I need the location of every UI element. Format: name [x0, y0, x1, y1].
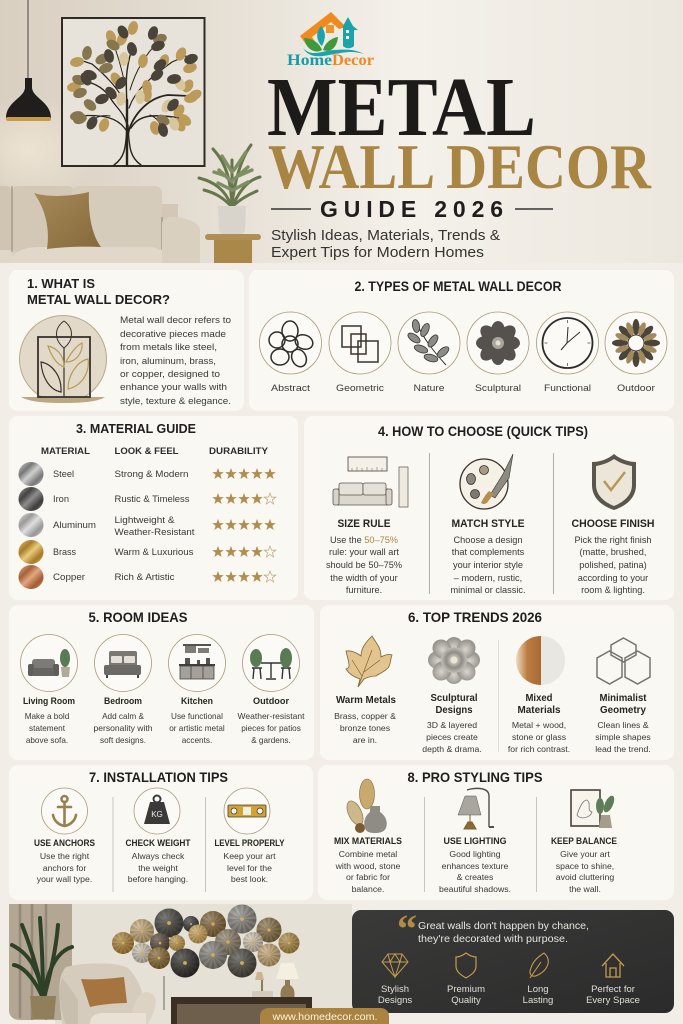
heading: 1. WHAT IS	[27, 276, 95, 291]
title: METAL: METAL	[267, 61, 536, 154]
tip: check weight: CHECK WEIGHT	[126, 838, 191, 849]
tip: mix materials: Combine metal	[339, 849, 397, 859]
room: outdoor: Outdoor	[253, 696, 289, 707]
heading: 6. TOP TRENDS 2026	[408, 609, 542, 625]
type: abstract	[260, 312, 322, 374]
heading: METAL WALL DECOR?	[27, 292, 170, 307]
tip: keep balance: Give your art	[560, 849, 610, 859]
tip: size rule: SIZE RULE	[338, 518, 390, 530]
quote text: they're decorated with purpose.	[418, 933, 568, 945]
type: geometric	[329, 312, 391, 374]
room: bedroom: Add calm &	[102, 712, 144, 721]
tip: choose finish: polished, patina)	[579, 560, 647, 570]
table header	[41, 446, 269, 457]
room: kitchen: Use functional	[171, 712, 223, 721]
trend: mixed materials: Mixed	[526, 692, 552, 704]
tip: keep balance: the wall.	[569, 884, 601, 894]
type labels: Abstract	[271, 383, 311, 393]
quote text	[418, 920, 589, 945]
tip: use anchors: your wall type.	[37, 874, 92, 884]
type: functional clock	[536, 312, 598, 374]
tip: match style: MATCH STYLE	[452, 518, 524, 530]
trend: warm metals: Warm Metals	[336, 694, 396, 706]
tip: mix materials: or fabric for	[346, 872, 390, 882]
table header: MATERIAL	[41, 446, 90, 457]
panel: 7 installation tips	[9, 765, 313, 900]
row: brass	[18, 540, 276, 564]
type: nature	[398, 312, 460, 374]
tip: use lighting: Good lighting	[449, 849, 501, 859]
heading: 3. MATERIAL GUIDE	[76, 421, 196, 436]
room: kitchen: Kitchen	[181, 696, 213, 707]
heading: 4. HOW TO CHOOSE (QUICK TIPS)	[378, 423, 588, 439]
room: outdoor: & gardens.	[251, 736, 291, 745]
tip: use lighting: beautiful shadows.	[439, 884, 511, 894]
trend: warm metals	[334, 636, 396, 745]
tip: level properly: Keep your art	[223, 851, 276, 861]
room: kitchen: accents.	[182, 736, 212, 745]
icon: armchair	[59, 963, 156, 1024]
tip: keep balance: KEEP BALANCE	[551, 836, 617, 847]
website pill	[260, 1008, 389, 1024]
panel: 6 top trends	[320, 605, 674, 760]
heading: 2. TYPES OF METAL WALL DECOR	[354, 279, 562, 294]
feature: stylish designs	[378, 954, 412, 1006]
row: steel: Strong & Modern	[114, 469, 188, 479]
room: bedroom: personality with	[94, 724, 153, 733]
trend: mixed materials: Materials	[518, 704, 561, 716]
row: aluminum: Aluminum	[53, 520, 96, 530]
trend: mixed materials: for rich contrast.	[508, 744, 570, 754]
logo: Decor	[332, 52, 374, 69]
tip: size rule: Use the 50–75%	[330, 535, 398, 545]
type: outdoor sunburst	[605, 312, 667, 374]
feature: long lasting: Long	[527, 984, 549, 995]
description	[120, 315, 231, 406]
tip: mix materials	[334, 779, 402, 894]
trend: minimalist geometry: Minimalist	[600, 692, 647, 704]
description: Metal wall decor refers to	[120, 315, 231, 325]
room: bedroom	[94, 634, 153, 745]
panel: 1 what is metal wall decor	[9, 270, 244, 411]
trend: mixed materials	[508, 636, 570, 754]
room: outdoor: pieces for patios	[241, 724, 301, 733]
type labels: Outdoor	[617, 383, 655, 393]
website pill: www.homedecor.com.	[271, 1011, 378, 1023]
trend: warm metals: Brass, copper &	[334, 711, 396, 721]
tagline: Expert Tips for Modern Homes	[271, 244, 484, 261]
description: style, texture & elegance.	[120, 396, 231, 406]
trend: minimalist geometry: Clean lines &	[597, 720, 649, 730]
tip: use anchors: USE ANCHORS	[34, 838, 95, 849]
logo: Home	[287, 52, 332, 69]
tip: keep balance: avoid cluttering	[556, 872, 614, 882]
tip: use anchors: Use the right	[40, 851, 90, 861]
tip: level properly: best look.	[231, 874, 268, 884]
description: from metals like steel,	[120, 342, 217, 352]
subtitle: GUIDE 2026: GUIDE 2026	[320, 196, 503, 222]
row: copper	[18, 565, 276, 589]
tip: match style: minimal or classic.	[450, 585, 526, 595]
trend: minimalist geometry	[595, 638, 651, 754]
trend: warm metals: bronze tones	[340, 723, 391, 733]
row: copper: Rich & Artistic	[114, 572, 175, 582]
console table with lamps	[164, 963, 312, 1024]
trend: mixed materials: Metal + wood,	[512, 720, 566, 730]
panel: 5 room ideas	[9, 605, 314, 760]
description: or copper, designed to	[120, 369, 220, 379]
type labels: Functional	[544, 383, 591, 393]
tip: check weight: before hanging.	[128, 874, 188, 884]
trend: sculptural designs: pieces create	[426, 732, 478, 742]
tip: choose finish	[572, 454, 655, 595]
table header: LOOK & FEEL	[114, 446, 179, 457]
tip: size rule: should be 50–75%	[326, 560, 402, 570]
tip: match style: your interior style	[453, 560, 523, 570]
tip: check weight: Always check	[132, 851, 185, 861]
feature: premium quality: Premium	[447, 984, 485, 995]
metal disc wall sculpture	[112, 904, 300, 978]
tip: level properly: level for the	[227, 863, 272, 873]
trend: sculptural designs: depth & drama.	[422, 744, 482, 754]
tip: match style: Choose a design	[454, 535, 522, 545]
description: iron, aluminum, brass,	[120, 356, 216, 366]
heading: 8. PRO STYLING TIPS	[408, 769, 542, 785]
room: outdoor: Weather-resistant	[238, 712, 305, 721]
panel: 2 types of metal wall decor	[249, 270, 674, 411]
room: living room: statement	[29, 724, 66, 733]
row: brass: Warm & Luxurious	[114, 547, 194, 557]
room: kitchen: or artistic metal	[169, 724, 225, 733]
room: living room: Make a bold	[25, 712, 70, 721]
row: iron: Rustic & Timeless	[114, 494, 190, 504]
trend: warm metals: are in.	[353, 735, 377, 745]
tip: choose finish: (matte, brushed,	[580, 547, 646, 557]
trend: sculptural designs: 3D & layered	[427, 720, 477, 730]
tip: use lighting: enhances texture	[442, 861, 508, 871]
tip: check weight: KG	[151, 810, 163, 819]
sofa with gold pillow	[0, 186, 200, 263]
tip: use lighting: USE LIGHTING	[444, 836, 506, 847]
tip: choose finish: CHOOSE FINISH	[572, 518, 655, 530]
tip: level properly	[214, 788, 285, 884]
description: enhance your walls with	[120, 382, 227, 392]
room: living room: above sofa.	[26, 736, 68, 745]
feature: premium quality: Quality	[451, 995, 481, 1006]
hero banner	[0, 0, 683, 263]
tip: keep balance: space to shine,	[556, 861, 614, 871]
heading	[27, 276, 170, 307]
trend: sculptural designs: Sculptural	[430, 692, 478, 704]
icon: sofa and rulers	[333, 457, 408, 507]
feature: perfect for every space	[586, 954, 640, 1006]
icon: pendant lamp	[6, 0, 51, 121]
tip: match style	[450, 454, 526, 595]
row: aluminum: Lightweight &	[114, 515, 174, 525]
tagline: Stylish Ideas, Materials, Trends &	[271, 227, 500, 244]
tip: use anchors	[34, 788, 95, 884]
tip: use lighting: & creates	[457, 872, 494, 882]
tip: size rule: rule: your wall art	[329, 547, 399, 557]
room: living room	[20, 634, 78, 745]
row: steel	[18, 462, 276, 486]
panel: 8 pro styling tips	[318, 765, 674, 900]
tip: mix materials: MIX MATERIALS	[334, 836, 402, 847]
tip: match style: – modern, rustic,	[454, 573, 522, 583]
trend: minimalist geometry: Geometry	[600, 704, 646, 716]
callout: dark quote panel	[352, 906, 674, 1013]
room: outdoor	[238, 634, 305, 745]
type labels: Sculptural	[475, 383, 521, 393]
trend: sculptural designs: Designs	[436, 704, 473, 716]
type labels: Nature	[414, 383, 444, 393]
tagline	[271, 227, 500, 261]
room: bedroom: Bedroom	[104, 696, 142, 707]
row: copper: Copper	[53, 572, 85, 582]
tip: check weight: the weight	[138, 863, 178, 873]
icon: shield with check	[592, 454, 636, 510]
feature: long lasting	[523, 953, 553, 1006]
trend: mixed materials: stone or glass	[512, 732, 567, 742]
tip: use anchors: anchors for	[43, 863, 86, 873]
trend: minimalist geometry: lead the trend.	[595, 744, 651, 754]
type labels: Geometric	[336, 383, 384, 393]
tip: size rule	[326, 457, 408, 595]
heading: 5. ROOM IDEAS	[88, 609, 188, 625]
row: iron: Iron	[53, 494, 69, 504]
feature: perfect for every space: Perfect for	[591, 984, 635, 995]
trend: minimalist geometry: simple shapes	[595, 732, 651, 742]
tip: size rule: furniture.	[346, 585, 382, 595]
logo	[287, 12, 374, 69]
description: decorative pieces made	[120, 329, 226, 339]
quote text: Great walls don't happen by chance,	[418, 920, 589, 932]
quote mark: “	[397, 906, 417, 951]
tip: mix materials: with wood, stone	[335, 861, 401, 871]
icon: framed leaf sculpture	[20, 316, 106, 403]
bottom room photo	[9, 904, 352, 1024]
table header: DURABILITY	[209, 446, 269, 457]
feature: stylish designs: Designs	[378, 995, 412, 1006]
panel: 3 material guide	[9, 416, 298, 600]
feature: stylish designs: Stylish	[381, 984, 409, 995]
row: aluminum	[18, 513, 276, 537]
tip: use lighting	[439, 788, 511, 894]
feature: long lasting: Lasting	[523, 995, 553, 1006]
feature: perfect for every space: Every Space	[586, 995, 640, 1006]
tip: choose finish: according to your	[578, 573, 648, 583]
room: living room: Living Room	[23, 696, 75, 707]
icon: palette and brush	[460, 454, 513, 509]
curtain	[9, 904, 72, 1020]
row: aluminum: Weather-Resistant	[114, 527, 195, 537]
tip: keep balance	[551, 790, 617, 894]
type labels	[271, 383, 655, 393]
type: sculptural	[467, 312, 529, 374]
tip: match style: that complements	[452, 547, 525, 557]
tip: mix materials: balance.	[352, 884, 384, 894]
tip: check weight	[126, 788, 191, 884]
row: iron	[18, 487, 276, 511]
row: steel: Steel	[53, 469, 74, 479]
room: kitchen	[168, 634, 226, 745]
icon: tall plant	[12, 918, 72, 1019]
framed metal tree artwork	[62, 18, 204, 166]
heading: 7. INSTALLATION TIPS	[89, 769, 228, 785]
tip: level properly: LEVEL PROPERLY	[214, 838, 285, 849]
room: bedroom: soft designs.	[100, 736, 146, 745]
trend: sculptural designs	[422, 636, 482, 754]
tip: choose finish: Pick the right finish	[574, 535, 652, 545]
panel: 4 how to choose	[304, 416, 674, 600]
tip: size rule: the width of your	[330, 573, 398, 583]
feature: premium quality	[447, 953, 485, 1006]
row: brass: Brass	[53, 547, 76, 557]
tip: choose finish: room & lighting.	[581, 585, 645, 595]
icon: potted plant on side table	[199, 145, 261, 263]
